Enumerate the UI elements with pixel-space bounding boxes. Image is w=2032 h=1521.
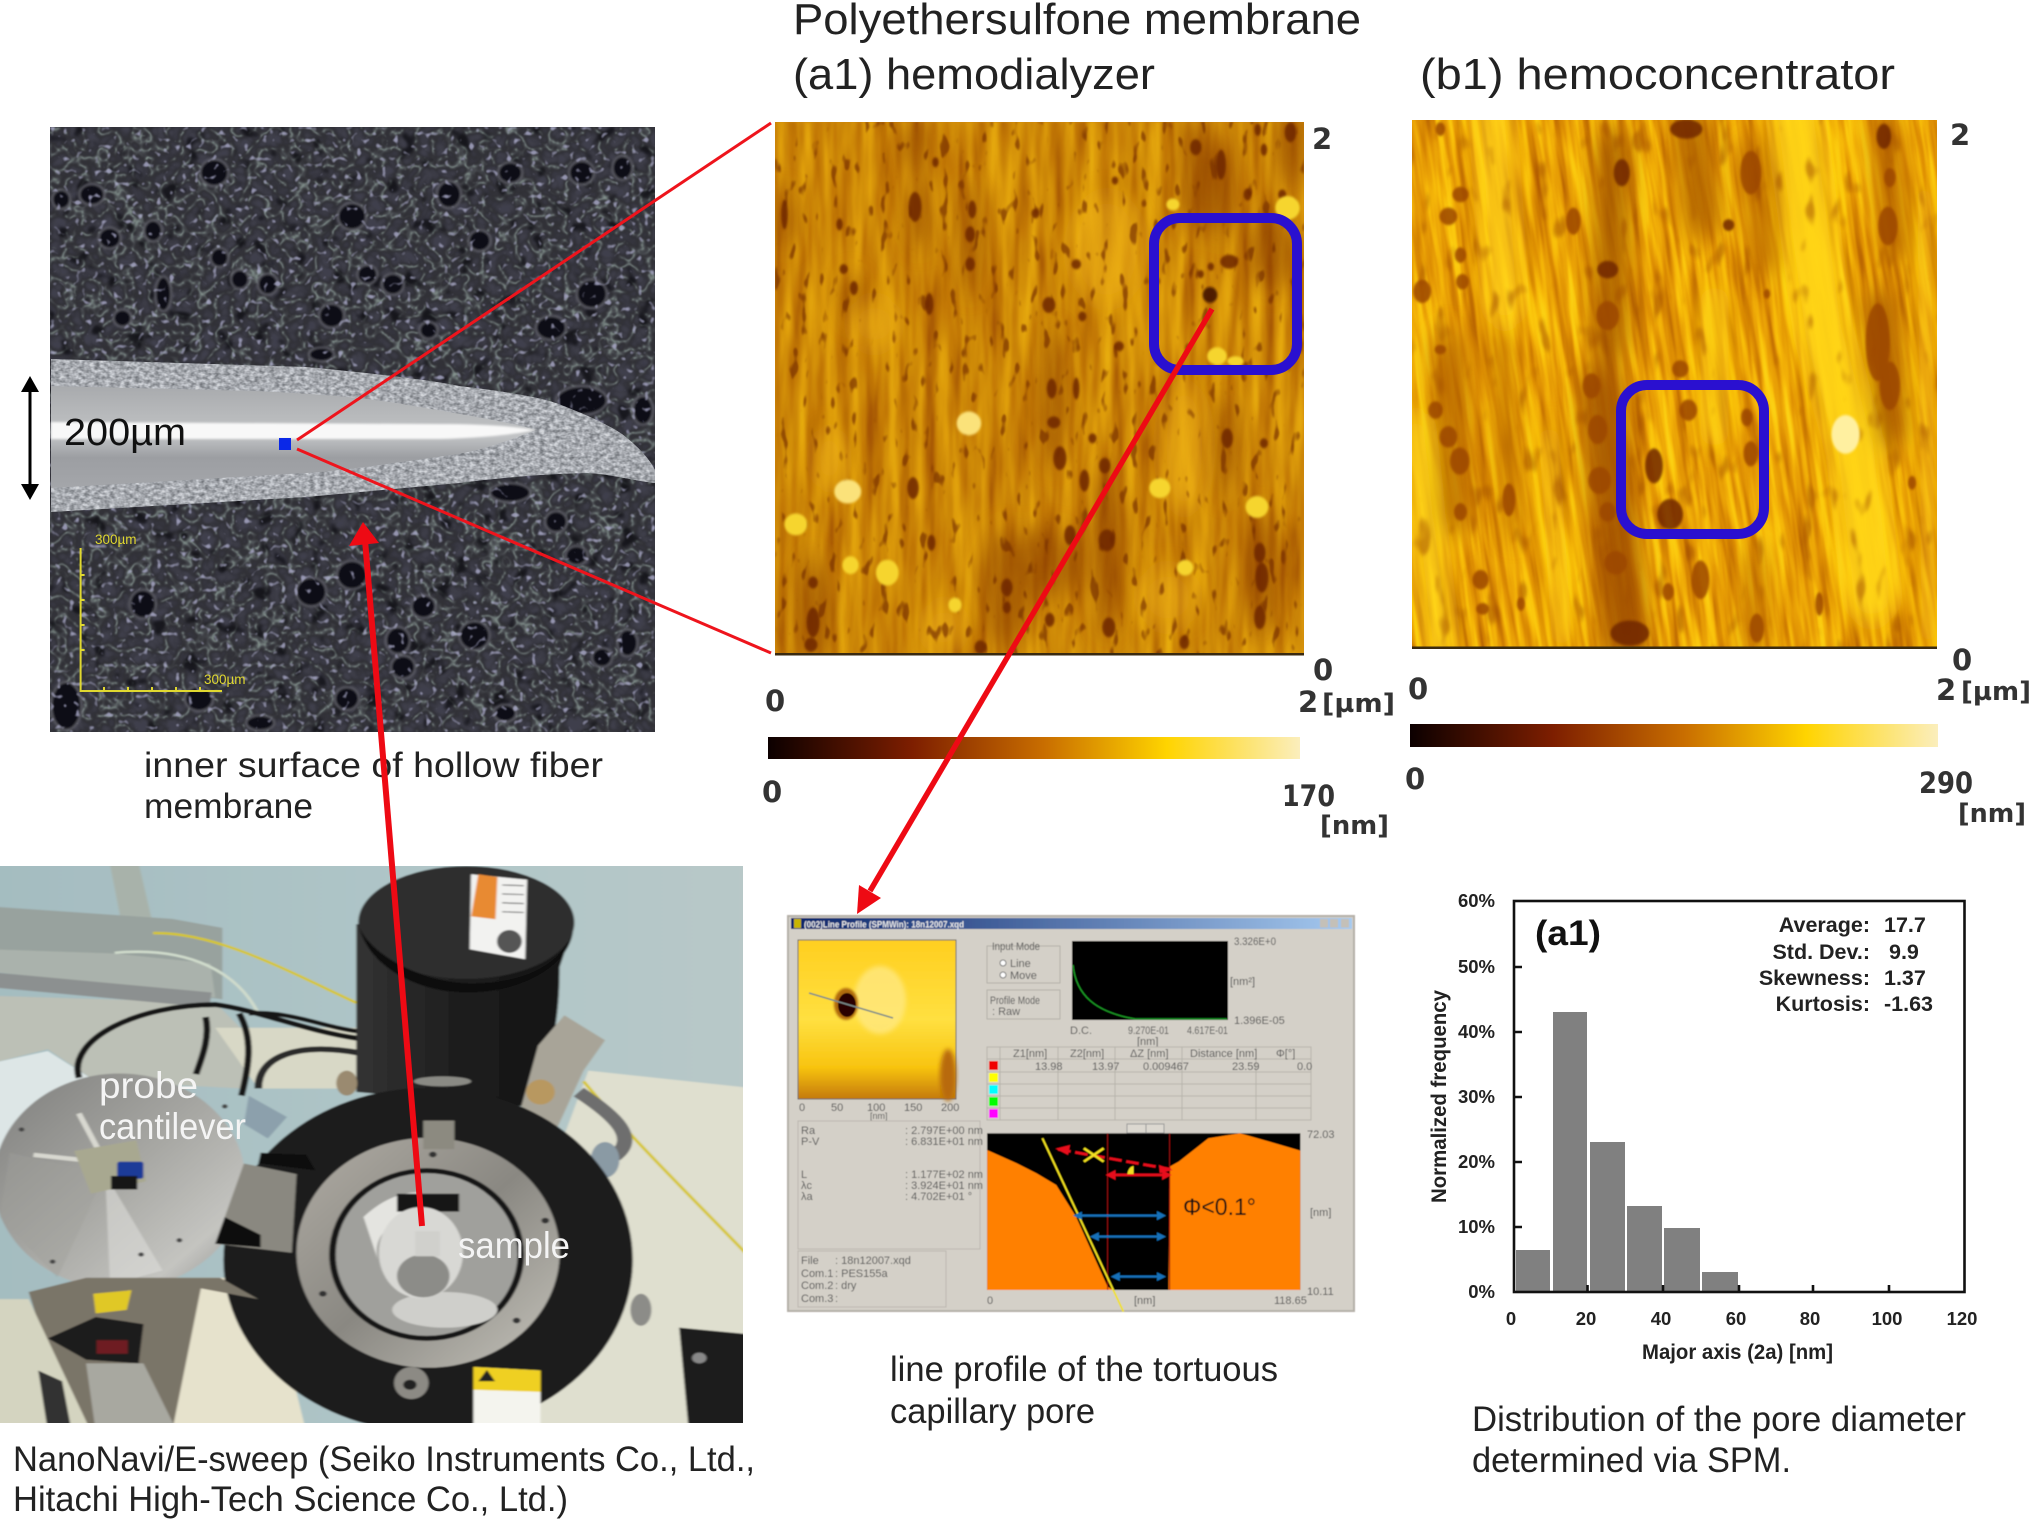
heading: b1 hemoconcentrator: (b1) hemoconcentrator (1420, 50, 1895, 99)
panel: line profile software window: 100 (867, 1102, 885, 1114)
arrow: red arrow from sample to SEM image (349, 522, 422, 1226)
black gap between disks (215, 1163, 297, 1253)
axis labels: b1: 0 (1952, 643, 1972, 677)
x axis labels: 120 (1947, 1308, 1977, 1329)
spectrum black plot (1072, 941, 1228, 1020)
arrow: fiber diameter double arrow (21, 376, 39, 500)
photo label: sample: sample (458, 1225, 570, 1266)
highlight: a1 blue rounded box (1154, 218, 1297, 370)
photo labels: probe cantilever: cantilever (99, 1106, 246, 1147)
panel: line profile software window: 23.59 (1232, 1061, 1260, 1073)
black cables (78, 1005, 359, 1096)
panel: line profile software window: : (835, 1293, 838, 1305)
O ring and inner stage (332, 1171, 521, 1338)
left silver probe disk (0, 1073, 245, 1289)
statistics: Kurtosis: (1776, 992, 1870, 1016)
panel: line profile software window: Z1[nm] (1013, 1048, 1047, 1060)
axis labels: a1: 2 (1312, 122, 1332, 156)
silver stage ring (297, 1138, 560, 1368)
panel: line profile software window: (002)Line Profile (SPMWin): 18n12007.xqd (804, 920, 964, 930)
panel: line profile software window: P-V (801, 1136, 820, 1148)
y axis labels: 60% (1458, 890, 1495, 911)
wall fittings top left (110, 866, 152, 918)
axis labels: b1: 2 (1936, 673, 1956, 707)
profile plot labels: 10.11 (1307, 1286, 1334, 1298)
panel: line profile software window: : 3.924E+01 nm (905, 1180, 983, 1192)
panel: line profile software window: L (801, 1169, 807, 1181)
panel: line profile software window: 0.0 (1297, 1061, 1312, 1073)
panel: line profile software window: 50 (831, 1102, 843, 1114)
scale bar: yellow 300 micron axes: 300µm (204, 672, 246, 687)
x axis labels: 20 (1576, 1308, 1596, 1329)
profile plot labels: [nm] (1134, 1295, 1155, 1307)
panel: line profile software window: [nm] (870, 1111, 888, 1121)
statistics: Std. Dev.: (1772, 940, 1870, 964)
x axis labels: 60 (1726, 1308, 1746, 1329)
axis labels: b1 (1408, 118, 2031, 707)
x axis title: Major axis (2a) [nm] (1642, 1341, 1833, 1364)
axis labels: a1: 2 (1298, 685, 1318, 719)
panel: line profile software window: : 2.797E+00 nm (905, 1125, 983, 1137)
panel: line profile software window: 0 (799, 1102, 805, 1114)
line profile plot (987, 1133, 1300, 1312)
b1 bottom axis line (1412, 646, 1937, 649)
caption: line profile of the tortuous capillary pore: capillary pore (890, 1392, 1095, 1431)
panel: line profile software window: Profile Mode (990, 995, 1040, 1007)
panel: line profile software window (788, 916, 1354, 1312)
black cylinder (356, 924, 574, 1106)
zoom lines: red lines to AFM image (297, 123, 771, 653)
input mode group (987, 946, 1060, 1019)
colour bar labels: a1: 170 (1282, 779, 1335, 813)
colour bar labels: a1: 0 (762, 775, 782, 809)
caption: distribution of the pore diameter: determined via SPM. (1472, 1441, 1791, 1480)
histogram bars (1516, 1012, 1738, 1292)
panel: line profile software window: Φ[°] (1276, 1048, 1295, 1060)
statistics: Average: (1779, 913, 1870, 937)
panel: line profile software window: 4.617E-01 (1187, 1025, 1228, 1037)
yellow and white wires (115, 933, 756, 1263)
colour bar: b1 height scale (1410, 724, 1938, 747)
statistics: 9.9 (1889, 940, 1919, 964)
panel: line profile software window: Distance [nm] (1190, 1048, 1257, 1060)
window title bar (791, 918, 1352, 929)
colour bar labels: b1: [nm] (1958, 799, 2026, 829)
scale bar: yellow 300 micron axes: 300µm (95, 532, 137, 547)
caption: line profile of the tortuous capillary pore (890, 1350, 1278, 1431)
marker: blue scan location square (279, 438, 291, 450)
colour bar: a1 height scale (768, 737, 1300, 759)
panel: line profile software window: : 4.702E+01 ° (905, 1191, 972, 1203)
caption: NanoNavi instrument: Hitachi High-Tech Science Co., Ltd.) (13, 1480, 568, 1519)
panel: line profile software window: Input Mode (992, 941, 1040, 953)
statistics (1759, 913, 1933, 1016)
panel: line profile software window: : 1.177E+02 nm (905, 1169, 983, 1181)
y axis labels: 30% (1458, 1086, 1495, 1107)
plot frame and ticks (1514, 901, 1964, 1292)
profile plot labels: Φ<0.1° (1183, 1194, 1256, 1221)
panel: line profile software window: Z2[nm] (1070, 1048, 1104, 1060)
panel: line profile software window: Line (1010, 958, 1031, 970)
caption: distribution of the pore diameter: Distribution of the pore diameter (1472, 1400, 1966, 1439)
panel: AFM image b1 (1412, 120, 1937, 646)
black plate bottom right (678, 1326, 743, 1423)
axis labels: b1: 0 (1408, 672, 1428, 706)
caption: NanoNavi instrument (13, 1440, 755, 1519)
colour bar labels: a1 (762, 775, 1389, 841)
y axis labels: 40% (1458, 1021, 1495, 1042)
measurement table (987, 1047, 1311, 1120)
panel: line profile software window: 13.98 (1035, 1061, 1063, 1073)
panel: line profile software window: : 18n12007.xqd (835, 1255, 911, 1267)
a1 bottom axis line (775, 653, 1304, 656)
nav buttons (1127, 1124, 1146, 1133)
caption: distribution of the pore diameter (1472, 1400, 1966, 1480)
axis labels: a1: [µm] (1322, 689, 1395, 719)
x axis labels: 80 (1800, 1308, 1820, 1329)
panel: line profile software window: : PES155a (835, 1268, 888, 1280)
fiber lumen (51, 386, 536, 488)
y axis labels: 10% (1458, 1216, 1495, 1237)
warning label on cylinder (470, 874, 527, 959)
caption: inner surface of hollow fiber membrane: membrane (144, 787, 313, 826)
photo labels: probe cantilever (99, 1065, 246, 1147)
axis labels: a1 (765, 122, 1395, 719)
panel: line profile software window: : dry (835, 1280, 857, 1292)
panel: line profile software window: : 6.831E+01 nm (905, 1136, 983, 1148)
hollow fiber wall (51, 359, 655, 512)
colour bar labels: b1 (1405, 762, 2026, 829)
text: 200 micron label: 200µm (64, 412, 186, 454)
switch box on right (521, 1015, 605, 1128)
colour bar labels: b1: 0 (1405, 762, 1425, 796)
scale bar: yellow 300 micron axes (81, 532, 246, 691)
panel: line profile software window: Com.1 (801, 1268, 833, 1280)
panel: line profile software window: Ra (801, 1125, 816, 1137)
panel: line profile software window: D.C. (1070, 1025, 1092, 1037)
large black disk (223, 1088, 633, 1432)
panel: line profile software window: [nm²] (1230, 976, 1255, 988)
x axis labels: 0 (1506, 1308, 1516, 1329)
profile plot labels: 72.03 (1307, 1129, 1335, 1141)
highlight: b1 blue rounded box (1621, 385, 1764, 534)
table surface (540, 1070, 743, 1423)
profile plot labels: 0 (987, 1295, 993, 1307)
panel: line profile software window: Com.2 (801, 1280, 833, 1292)
panel: line profile software window: λc (801, 1180, 812, 1192)
panel: line profile software window: Com.3 (801, 1293, 833, 1305)
panel: line profile software window: λa (801, 1191, 814, 1203)
axis labels: a1: 0 (765, 684, 785, 718)
yellow caution sticker (474, 1367, 540, 1431)
file info block (798, 1251, 946, 1307)
bar chart: pore diameter histogram (1428, 890, 1977, 1364)
caption: NanoNavi instrument: NanoNavi/E-sweep (Seiko Instruments Co., Ltd., (13, 1440, 755, 1479)
axis labels: b1: [µm] (1961, 677, 2031, 707)
panel: line profile software window: 9.270E-01 (1128, 1025, 1169, 1037)
profile plot labels (987, 1129, 1335, 1307)
y axis labels (1458, 890, 1495, 1302)
panel: line profile software window: 1.396E-05 (1234, 1015, 1285, 1027)
topography inset (798, 940, 956, 1099)
colour bar labels: a1: [nm] (1320, 811, 1389, 841)
caption: inner surface of hollow fiber membrane (144, 746, 603, 826)
heading: polyethersulfone membrane a1 hemodialyzer (793, 0, 1361, 99)
panel: line profile software window: ΔZ [nm] (1130, 1048, 1169, 1060)
panel: line profile software window: 0.009467 (1143, 1061, 1189, 1073)
panel: line profile software window: : Raw (992, 1006, 1020, 1018)
statistics: -1.63 (1884, 992, 1933, 1016)
panel: photo of NanoNavi instrument (0, 853, 756, 1432)
photo labels: probe cantilever: probe (99, 1065, 198, 1106)
statistics: 17.7 (1884, 913, 1926, 937)
panel: line profile software window: [nm] (1137, 1036, 1158, 1048)
arrow: red arrow from pore to line profile window (857, 309, 1212, 914)
panel: AFM image a1 (775, 110, 1304, 662)
caption: inner surface of hollow fiber membrane: inner surface of hollow fiber (144, 746, 603, 785)
statistics text block (798, 1121, 980, 1249)
profile plot labels: 118.65 (1274, 1295, 1307, 1307)
x axis labels: 100 (1872, 1308, 1902, 1329)
panel: line profile software window: Move (1010, 970, 1037, 982)
panel: line profile software window: File (801, 1255, 819, 1267)
y axis labels: 0% (1468, 1281, 1495, 1302)
panel: line profile software window: 200 (941, 1102, 959, 1114)
caption: line profile of the tortuous capillary pore: line profile of the tortuous (890, 1350, 1278, 1389)
panel: line profile software window: 3.326E+0 (1234, 936, 1276, 948)
profile plot labels: [nm] (1310, 1207, 1331, 1219)
y axis title: Normalized frequency (1428, 990, 1451, 1203)
axis labels: b1: 2 (1950, 118, 1970, 152)
statistics: Skewness: (1759, 966, 1870, 990)
axis labels: a1: 0 (1313, 653, 1333, 687)
white specular streak (51, 422, 535, 439)
panel: line profile software window: 150 (904, 1102, 922, 1114)
lower left machine block (29, 1278, 258, 1431)
y axis labels: 50% (1458, 956, 1495, 977)
panel: SEM image of hollow fiber inner surface (50, 127, 655, 732)
x axis labels (1506, 1308, 1977, 1329)
colour bar labels: b1: 290 (1919, 766, 1973, 800)
panel tag a1: (a1) (1535, 914, 1601, 953)
y axis labels: 20% (1458, 1151, 1495, 1172)
x axis labels: 40 (1651, 1308, 1671, 1329)
heading: polyethersulfone membrane a1 hemodialyzer: (a1) hemodialyzer (793, 50, 1155, 99)
statistics: 1.37 (1884, 966, 1926, 990)
panel: line profile software window: 13.97 (1092, 1061, 1120, 1073)
